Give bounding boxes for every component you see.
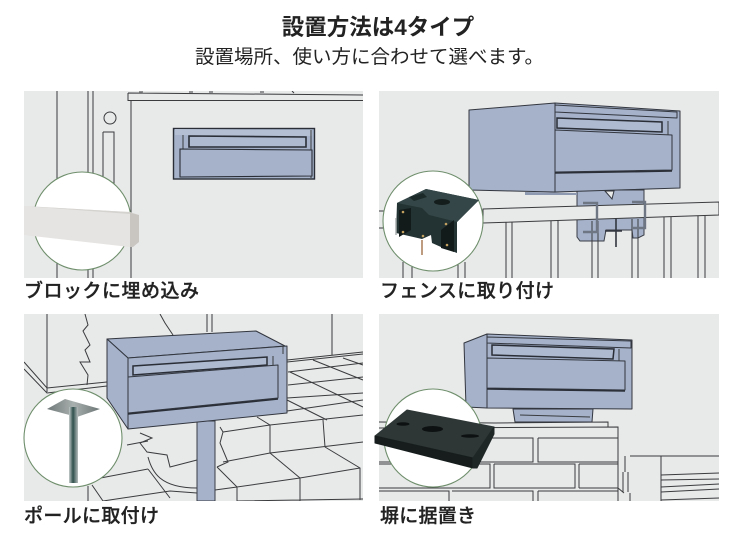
ivy outline	[80, 314, 228, 467]
detail circle: pole bracket	[24, 389, 122, 487]
detail circle: fence bracket	[383, 171, 483, 271]
panel: pole mount	[24, 314, 363, 527]
label: ポールに取付け	[24, 505, 159, 527]
panel: wall-top placement	[375, 314, 719, 527]
panel: fence mount	[379, 91, 719, 302]
scene: fence with mailbox	[379, 91, 719, 278]
title: 設置方法は4タイプ	[282, 15, 475, 40]
scene: wall with embedded mailbox	[24, 91, 363, 278]
mailbox	[464, 334, 632, 422]
scene: brick wall with mailbox	[379, 314, 719, 501]
detail circle: block plate	[24, 172, 139, 270]
label: ブロックに埋め込み	[24, 279, 199, 302]
mailbox in wall	[174, 128, 314, 179]
bolt	[605, 218, 622, 247]
scene: steps and pole with mailbox	[24, 314, 363, 501]
pole	[197, 421, 215, 501]
mailbox	[469, 103, 680, 199]
clamps	[583, 202, 645, 232]
panel: block embed	[24, 91, 363, 302]
label: 塀に据置き	[380, 505, 476, 527]
detail circle: base plate	[375, 389, 494, 487]
subtitle: 設置場所、使い方に合わせて選べます。	[195, 46, 544, 68]
mailbox	[107, 331, 287, 429]
label: フェンスに取り付け	[380, 280, 554, 302]
bracket	[577, 190, 644, 241]
fence rail	[483, 202, 719, 223]
